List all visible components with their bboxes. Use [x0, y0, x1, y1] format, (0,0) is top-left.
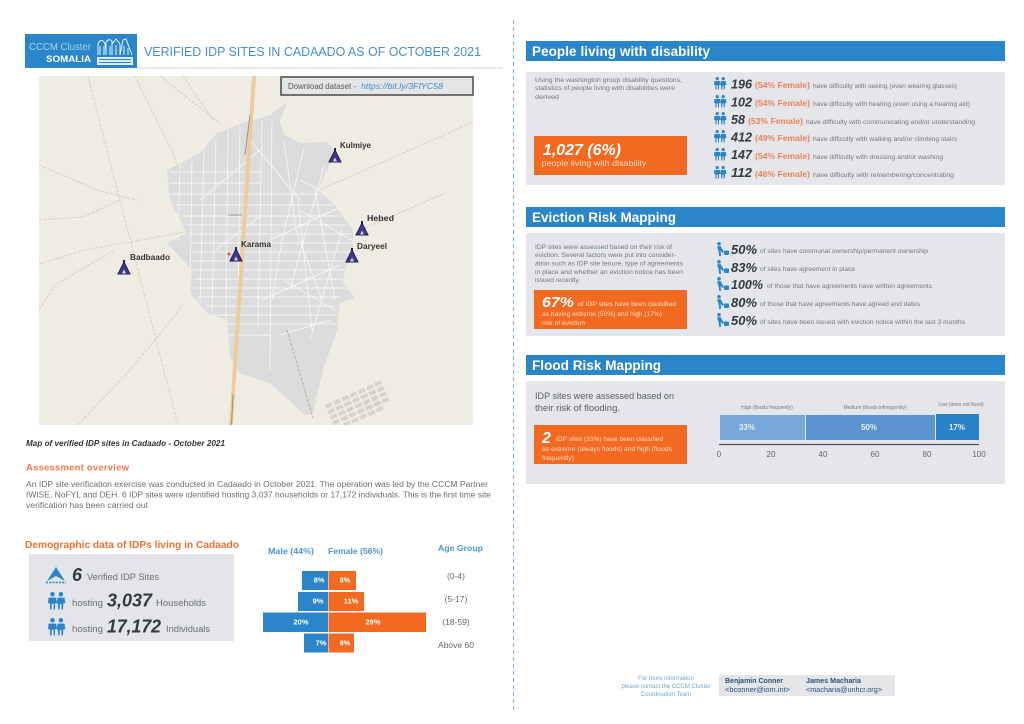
- disability rows: 112: [731, 165, 753, 180]
- marker: Badbaado: [118, 252, 170, 274]
- disability rows: have difficulty with remembering/concentrating: [813, 172, 954, 179]
- marker: Daryeel: [346, 241, 387, 262]
- eviction rows: 80%: [731, 295, 757, 310]
- stacked bar chart: 33%: [739, 423, 755, 432]
- eviction rows: [717, 242, 966, 328]
- contact box: Benjamin Conner: [725, 678, 783, 685]
- stacked bar chart: 60: [871, 450, 880, 459]
- stacked bar chart: [717, 402, 986, 459]
- section heading: disability: [526, 41, 1005, 61]
- panel: demographic totals: 6: [72, 565, 83, 585]
- population pyramid: 9%: [313, 596, 324, 606]
- map of Cadaado: [39, 76, 473, 431]
- disability rows: 147: [731, 147, 753, 162]
- callout: 67%: [534, 290, 687, 329]
- disability rows: have difficulty with walking and/or climbing stairs: [813, 136, 958, 143]
- contact note: [621, 676, 711, 698]
- contact box: <bconner@iom.int>: [725, 687, 790, 694]
- stacked bar chart: Medium (floods infrequently): [843, 405, 907, 411]
- assessment overview text: [26, 480, 492, 510]
- panel: eviction: ation such as IDP site tenure, type of agreements: [535, 260, 684, 268]
- callout: 67%: 67%: [542, 294, 574, 311]
- panel: disability: [526, 72, 1005, 185]
- eviction rows: of sites have communal ownership/permanent ownership: [760, 248, 928, 255]
- population pyramid: 8%: [340, 638, 351, 648]
- disability rows: have difficulty with seeing (even wearing glasses): [813, 83, 957, 90]
- section heading: flood: [526, 355, 1005, 375]
- disability rows: 412: [730, 130, 753, 144]
- eviction rows: 83%: [731, 260, 757, 275]
- disability rows: have difficulty with communicating and/or understanding: [806, 119, 975, 126]
- population pyramid: Female (56%): [328, 546, 383, 556]
- tracks: [39, 76, 473, 425]
- section heading: eviction: [526, 207, 1005, 227]
- panel: eviction: issued recently.: [535, 277, 580, 284]
- population pyramid: 8%: [314, 576, 325, 584]
- assessment overview text: IWISE, NoFYL and DEH. 6 IDP sites were identified hosting 3,037 households or 17,172 individuals. This is the first time site: [26, 490, 492, 500]
- disability rows: (46% Female): [755, 169, 810, 179]
- panel: demographic totals: 3,037: [107, 590, 153, 610]
- eviction rows: of those that have agreements have written agreements: [767, 283, 933, 290]
- page divider: [512, 20, 514, 710]
- disability rows: have difficulty with dressing and/or washing: [813, 154, 943, 161]
- population pyramid: (5-17): [445, 594, 467, 604]
- callout: 67%: of IDP sites have been classified: [578, 301, 676, 308]
- logo: CCCM Cluster Somalia: SOMALIA: [46, 54, 91, 65]
- eviction rows: of sites have been issued with eviction notice within the last 3 months: [760, 319, 966, 326]
- panel: disability: Using the washington group disability questions,: [535, 77, 682, 84]
- disability rows: have difficulty with hearing (even using a hearing aid): [813, 101, 970, 108]
- population pyramid: Age Group: [438, 543, 483, 553]
- assessment overview text: An IDP site verification exercise was conducted in Cadaado in October 2021. The operation was led by the CCCM Partner: [26, 480, 488, 489]
- callout: 1,027: [534, 136, 687, 175]
- callout: 1,027: people living with disability: [542, 158, 647, 168]
- population pyramid: (18-59): [442, 617, 470, 627]
- panel: demographic totals: Verified IDP Sites: [87, 572, 160, 582]
- callout: 2 sites: 2: [541, 430, 551, 447]
- panel: flood: IDP sites were assessed based on: [535, 391, 674, 402]
- panel: eviction: IDP sites were assessed based on their risk of: [535, 244, 672, 251]
- panel: demographic totals: Individuals: [166, 624, 211, 634]
- population pyramid: 7%: [316, 638, 327, 648]
- population pyramid: Above 60: [438, 640, 474, 650]
- disability rows: [714, 76, 975, 180]
- callout: 1,027: 1,027 (6%): [543, 142, 621, 159]
- stacked bar chart: 20: [767, 450, 776, 459]
- download dataset box: Download dataset -: [288, 81, 356, 91]
- contact box: <macharia@unhcr.org>: [806, 687, 882, 694]
- title: VERIFIED IDP SITES IN CADAADO AS OF OCTOBER 2021: [144, 44, 481, 59]
- panel: demographic totals: Households: [156, 598, 207, 608]
- stacked bar chart: 17%: [949, 423, 965, 432]
- stacked bar chart: 0: [717, 450, 722, 459]
- camp grid: [325, 380, 390, 425]
- population pyramid: [263, 543, 483, 652]
- disability rows: (49% Female): [755, 133, 810, 143]
- section heading: flood: Flood Risk Mapping: [532, 358, 661, 373]
- settlement area: [167, 102, 355, 415]
- eviction rows: of sites have agreement in place: [760, 266, 855, 273]
- contact note: Coordination Team: [641, 692, 691, 698]
- stacked bar chart: High (floods frequently): [741, 405, 793, 411]
- panel: demographic totals: [29, 554, 234, 641]
- stacked bar chart: Low (does not flood): [938, 402, 984, 408]
- disability rows: 102: [731, 94, 753, 110]
- population pyramid: 29%: [365, 618, 381, 626]
- population pyramid: 11%: [344, 596, 359, 606]
- callout: 2 sites: frequently): [542, 455, 574, 462]
- contact box: [719, 675, 895, 696]
- population pyramid: 20%: [293, 618, 309, 626]
- callout: 67%: as having extreme (50%) and high (17%): [542, 311, 662, 318]
- stacked bar chart: 50%: [861, 423, 877, 432]
- panel: flood: their risk of flooding.: [535, 403, 620, 414]
- marker: Karama: Karama: [241, 239, 271, 249]
- marker: Kulmiye: [329, 140, 371, 162]
- stacked bar chart: 80: [923, 450, 932, 459]
- marker: Karama: [230, 239, 271, 261]
- panel: flood: [526, 381, 1005, 484]
- eviction rows: of those that have agreements have agreed end dates: [760, 301, 921, 308]
- callout: 67%: risk of eviction: [542, 320, 585, 327]
- demographic heading: Demographic data of IDPs living in Cadaado: [25, 539, 239, 551]
- street network: [170, 120, 360, 370]
- population pyramid: Male (44%): [268, 546, 314, 556]
- logo: CCCM Cluster Somalia: [25, 34, 137, 68]
- panel: eviction: in place and whether an eviction notice has been: [535, 269, 683, 276]
- eviction rows: 50%: [731, 313, 757, 328]
- disability rows: (54% Female): [755, 80, 810, 90]
- callout: 2 sites: [534, 425, 687, 464]
- panel: eviction: [526, 233, 1005, 336]
- panel: eviction: eviction. Several factors were put into consider-: [535, 252, 676, 259]
- panel: disability: statistics of people living with disabilities were: [535, 85, 675, 92]
- disability rows: (54% Female): [755, 98, 810, 108]
- marker: Badbaado: Badbaado: [130, 252, 170, 262]
- panel: disability: derived: [535, 94, 559, 101]
- main road: [231, 76, 254, 425]
- section heading: disability: People living with disability: [532, 44, 710, 59]
- disability rows: (54% Female): [755, 151, 810, 161]
- stacked bar chart: 100: [972, 450, 986, 459]
- marker: Kulmiye: Kulmiye: [340, 140, 371, 150]
- contact box: James Macharia: [806, 678, 861, 685]
- contact note: For more information: [638, 676, 694, 682]
- icon: sites: [46, 567, 66, 582]
- disability rows: 58: [731, 112, 746, 127]
- section heading: eviction: Eviction Risk Mapping: [532, 210, 676, 225]
- callout: 2 sites: as extreme (always floods) and high (floods: [542, 446, 673, 453]
- panel: demographic totals: hosting: [72, 624, 103, 634]
- stacked bar chart: 40: [819, 450, 828, 459]
- download dataset box: [281, 77, 473, 95]
- assessment overview heading: Assessment overview: [26, 462, 130, 474]
- eviction rows: 50%: [731, 242, 757, 257]
- disability rows: (53% Female): [748, 116, 803, 126]
- panel: demographic totals: 17,172: [107, 616, 161, 636]
- marker: Hebed: [356, 213, 394, 235]
- download dataset box: https://bit.ly/3FfYC58: [361, 81, 443, 91]
- disability rows: 196: [731, 76, 753, 92]
- contact note: please contact the CCCM Cluster: [621, 684, 711, 690]
- panel: demographic totals: hosting: [72, 598, 103, 608]
- marker: Hebed: Hebed: [367, 213, 394, 223]
- map caption: Map of verified IDP sites in Cadaado - October 2021: [26, 438, 225, 448]
- logo: CCCM Cluster Somalia: CCCM Cluster: [29, 41, 91, 53]
- population pyramid: (0-4): [447, 571, 465, 581]
- marker: Daryeel: Daryeel: [357, 241, 387, 251]
- assessment overview text: verification has been carried out: [26, 501, 149, 510]
- map of Cadaado: Cadaado: [228, 213, 242, 217]
- callout: 2 sites: IDP sites (33%) have been classified: [556, 436, 663, 443]
- eviction rows: 100%: [731, 277, 763, 292]
- population pyramid: 8%: [340, 576, 351, 584]
